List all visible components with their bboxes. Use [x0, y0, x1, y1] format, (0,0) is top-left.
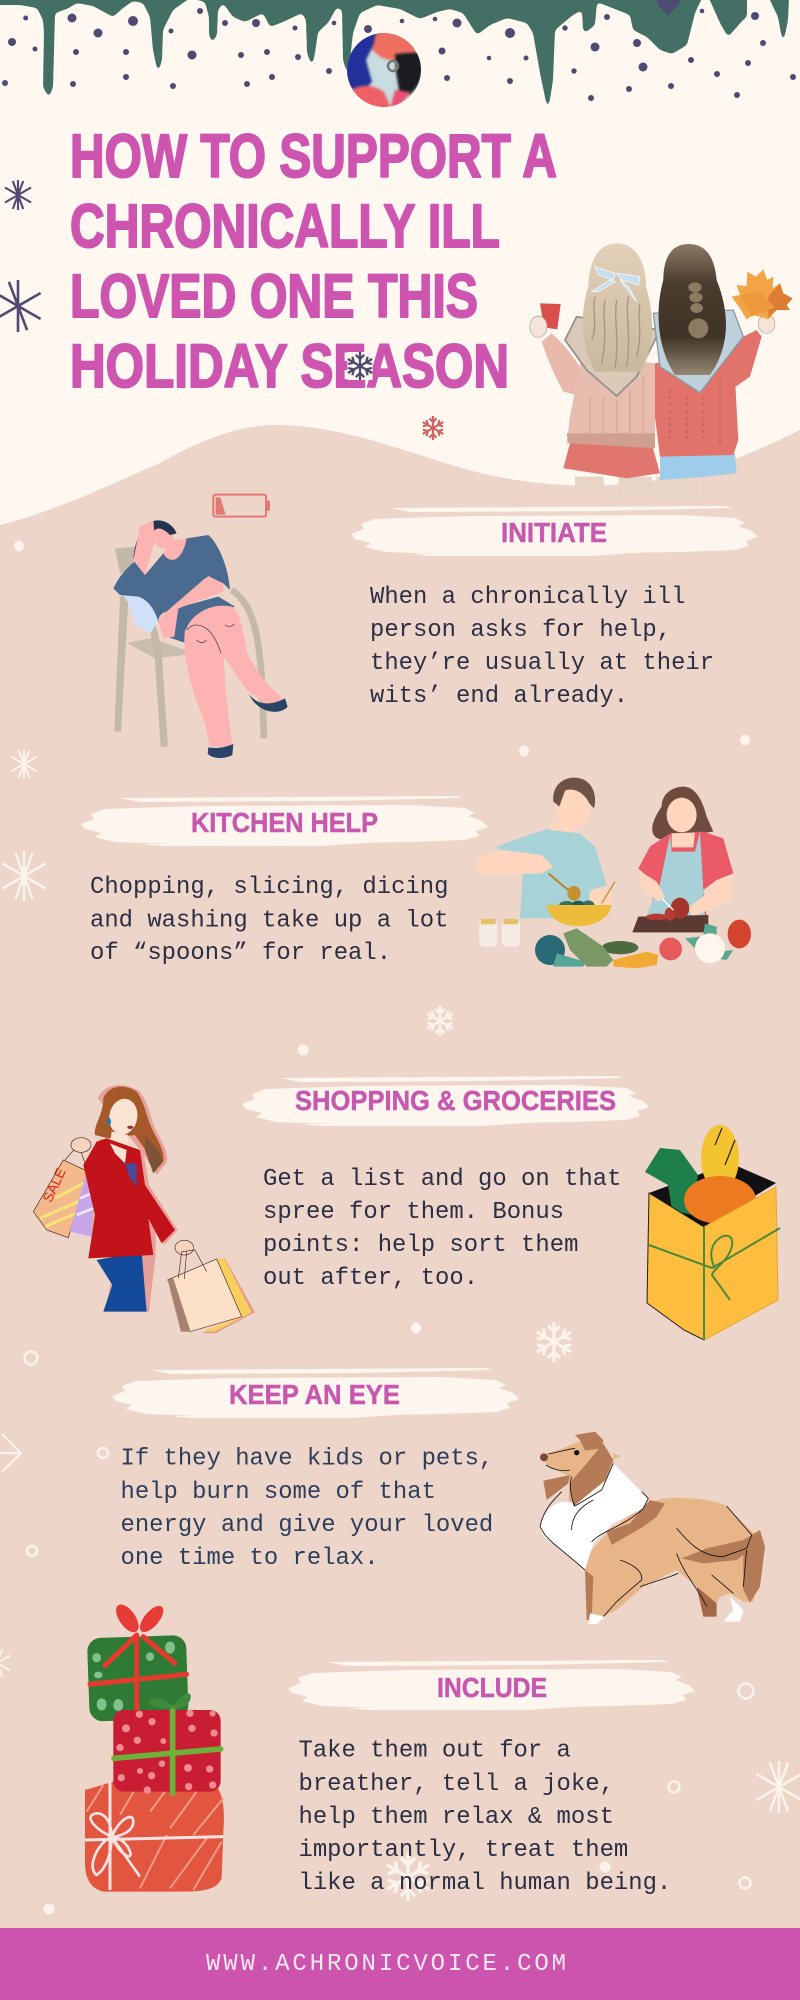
heading: include: INCLUDE: [437, 1672, 547, 1703]
section: keep an eye: [112, 1368, 765, 1624]
logo: watercolour portrait: [347, 33, 421, 107]
text block: initiate: they’re usually at their: [370, 650, 714, 677]
illustration: exhausted woman on a chair: [113, 520, 288, 758]
dark star: upper left: [5, 180, 31, 210]
illustration: stack of gifts: [85, 1601, 224, 1892]
white decorations: stars, flakes, dots and rings: [0, 540, 800, 1914]
heading: shopping and groceries: [242, 1076, 649, 1126]
text block: shopping and groceries: out after, too.: [263, 1265, 478, 1292]
text block: initiate: person asks for help,: [370, 617, 671, 644]
text block: kitchen help: Chopping, slicing, dicing: [90, 874, 448, 901]
footer bar: [0, 1928, 800, 2000]
section: kitchen help: [81, 778, 751, 968]
text block: initiate: wits’ end already.: [370, 683, 628, 710]
heading: kitchen help: [81, 796, 488, 846]
footer website address: WWW.ACHRONICVOICE.COM: [206, 1951, 569, 1978]
illustration: collie dog: [540, 1432, 765, 1624]
section: include: [85, 1601, 695, 1897]
text block: kitchen help: and washing take up a lot: [90, 908, 448, 934]
illustration: two people cooking: [477, 778, 751, 968]
heading: shopping and groceries: SHOPPING & GROCERIES: [295, 1085, 616, 1116]
text block: shopping and groceries: spree for them. Bonus: [263, 1199, 564, 1226]
text block: include: like a normal human being.: [298, 1870, 671, 1897]
illustration: two friends seen from behind: [530, 243, 793, 495]
illustration: woman with shopping bags: SALE: [39, 1165, 69, 1205]
title: [70, 122, 557, 400]
text block: include: Take them out for a: [298, 1738, 571, 1764]
red snowflake: [421, 416, 445, 440]
text block: keep an eye: energy and give your loved: [120, 1512, 493, 1539]
heading: initiate: [351, 506, 758, 556]
illustration: grocery bag: [645, 1125, 780, 1340]
icon: low battery: [213, 495, 270, 517]
text block: keep an eye: help burn some of that: [120, 1479, 436, 1506]
heading: include: [288, 1660, 695, 1710]
heading: keep an eye: [112, 1368, 519, 1418]
background: pink wave: [0, 425, 800, 2000]
text block: keep an eye: If they have kids or pets,: [120, 1446, 493, 1472]
text block: include: breather, tell a joke,: [298, 1771, 614, 1798]
text block: include: help them relax & most: [298, 1804, 614, 1831]
illustration: woman with shopping bags: [33, 1085, 255, 1333]
text block: keep an eye: one time to relax.: [120, 1545, 379, 1572]
section: shopping and groceries: [33, 1076, 780, 1340]
text block: initiate: When a chronically ill: [370, 584, 685, 611]
text block: shopping and groceries: points: help sort them: [263, 1232, 578, 1259]
dark star: lower left: [0, 280, 41, 332]
section: initiate: [113, 495, 758, 758]
heading: keep an eye: KEEP AN EYE: [229, 1379, 400, 1410]
text block: include: importantly, treat them: [298, 1837, 628, 1864]
title: LOVED ONE THIS: [70, 262, 478, 330]
heading: initiate: INITIATE: [501, 517, 607, 548]
heading: kitchen help: KITCHEN HELP: [191, 807, 378, 838]
falling dots on top border: [2, 0, 796, 101]
snowflake over title: [346, 352, 374, 380]
text block: shopping and groceries: Get a list and go on that: [263, 1166, 621, 1193]
dripping green icing border: [0, 0, 790, 112]
title: HOLIDAY SEASON: [70, 332, 509, 400]
title: HOW TO SUPPORT A: [70, 122, 557, 190]
title: CHRONICALLY ILL: [70, 192, 500, 260]
text block: kitchen help: of “spoons” for real.: [90, 940, 391, 967]
